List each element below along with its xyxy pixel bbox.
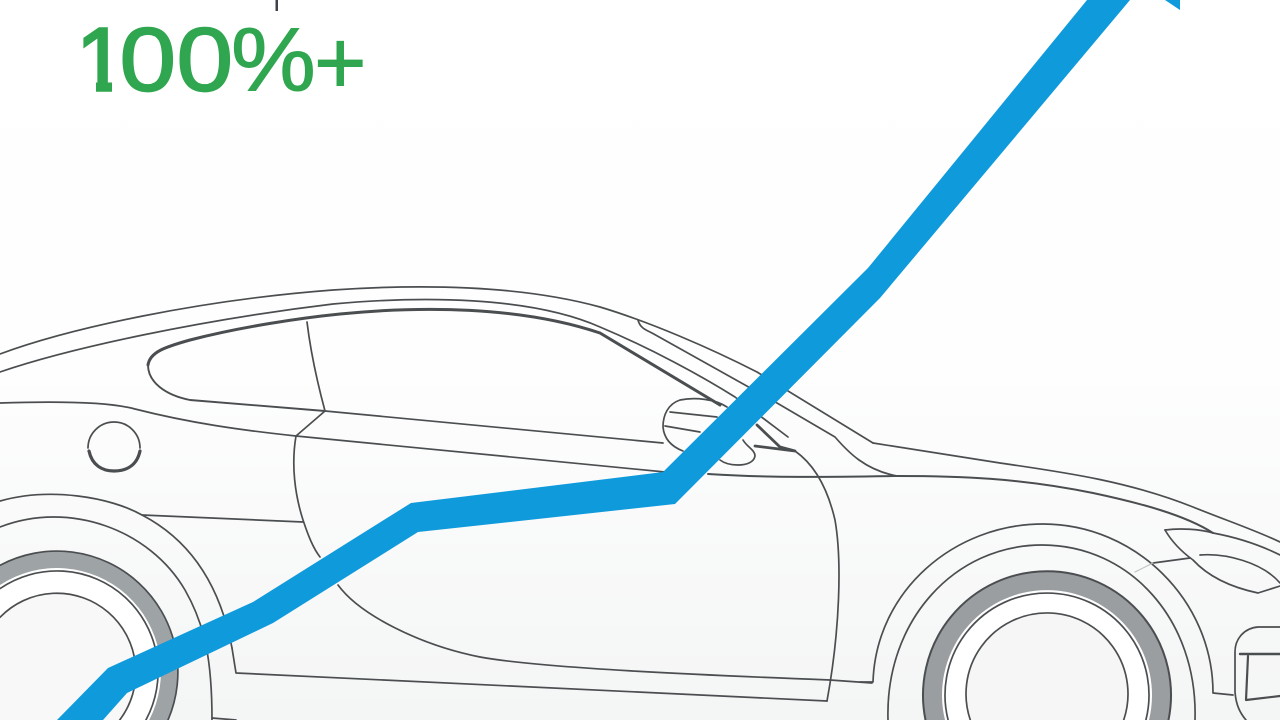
headline stat: 100%+: % xyxy=(231,9,316,110)
belt line and hood crease xyxy=(708,474,1213,533)
side mirror xyxy=(663,399,755,465)
front fender crease xyxy=(1153,558,1190,563)
roof outer line xyxy=(0,287,873,443)
shoulder line xyxy=(0,402,665,472)
door front edge xyxy=(795,451,839,701)
rocker panel xyxy=(232,648,827,701)
faint fender crease xyxy=(1135,563,1153,572)
hood top line xyxy=(873,443,1280,542)
headlight xyxy=(1165,529,1280,593)
door outline xyxy=(294,436,872,683)
car line drawing xyxy=(0,287,1280,720)
headline stat: 100%+: 1 xyxy=(76,10,126,110)
windshield strip xyxy=(638,320,897,476)
front bumper and grille xyxy=(1235,627,1280,720)
front quarter glass xyxy=(755,425,795,451)
headline stat: 100%+: 0 xyxy=(120,10,176,110)
headline stat: 100%+: + xyxy=(314,14,367,114)
cropped heading descender xyxy=(276,0,278,11)
rear wheel arch xyxy=(0,494,232,648)
window pillar xyxy=(296,322,325,436)
headline stat: 100%+ xyxy=(83,26,363,92)
front wheel xyxy=(923,571,1171,720)
side window xyxy=(148,365,325,411)
side window top edge xyxy=(148,309,720,405)
front wheel arch xyxy=(860,524,1233,695)
window sill line xyxy=(325,411,663,443)
cropped arrowhead tip xyxy=(1165,0,1180,10)
roof inner line xyxy=(0,300,788,437)
headline stat: 100%+: 0 xyxy=(176,10,233,110)
rear body line xyxy=(142,515,303,522)
rear wheel xyxy=(0,551,178,720)
fuel cap xyxy=(88,422,140,471)
